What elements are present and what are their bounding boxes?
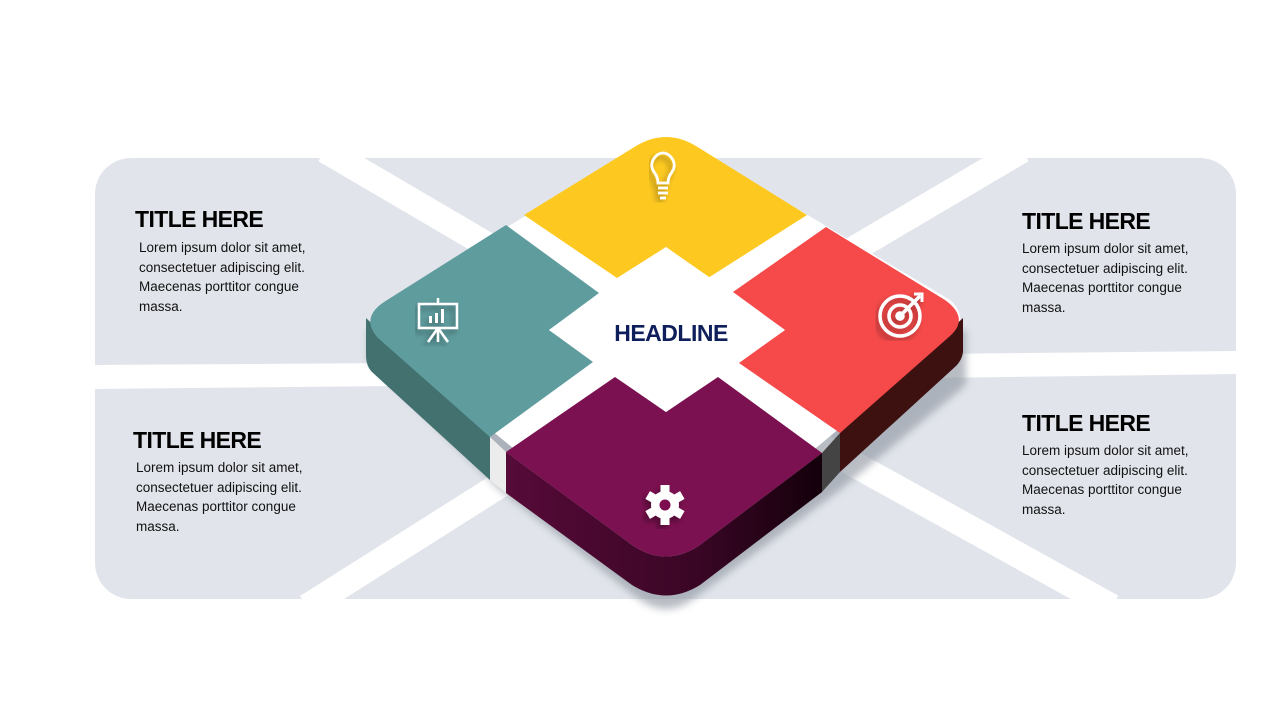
body: top right xyxy=(1022,241,1189,314)
body: top right: massa. xyxy=(1022,300,1066,314)
text block: top left xyxy=(135,206,306,314)
body: top left: consectetuer adipiscing elit. xyxy=(139,260,305,274)
body: top left xyxy=(139,240,306,314)
body: bottom left: Maecenas porttitor congue xyxy=(136,499,296,514)
body: top right: consectetuer adipiscing elit. xyxy=(1022,260,1188,276)
text block: top right xyxy=(1022,208,1189,314)
body: bottom right: consectetuer adipiscing elit. xyxy=(1022,462,1188,478)
body: top right: Maecenas porttitor congue xyxy=(1022,280,1182,295)
body: top left: massa. xyxy=(139,298,183,314)
body: bottom left: Lorem ipsum dolor sit amet, xyxy=(136,460,303,475)
body: bottom left: consectetuer adipiscing elit. xyxy=(136,480,302,494)
icon: target xyxy=(880,294,922,336)
title: top right: TITLE HERE xyxy=(1022,208,1150,234)
icon: light bulb xyxy=(652,153,674,198)
slab: yellow segment xyxy=(524,137,807,278)
slab: red segment xyxy=(733,227,963,472)
slab: purple segment xyxy=(506,377,822,596)
body: bottom left: massa. xyxy=(136,518,180,534)
icon: presentation board xyxy=(419,298,457,342)
diagram background and 3D slab xyxy=(95,137,1236,614)
slab: teal segment xyxy=(366,225,599,480)
body: top left: Lorem ipsum dolor sit amet, xyxy=(139,240,306,255)
body: bottom right xyxy=(1022,443,1189,516)
body: bottom left xyxy=(136,460,303,534)
body: bottom right: massa. xyxy=(1022,502,1066,516)
body: bottom right: Lorem ipsum dolor sit amet, xyxy=(1022,443,1189,458)
slab shadow xyxy=(368,330,966,609)
center headline diamond xyxy=(549,247,785,412)
title: bottom left: TITLE HERE xyxy=(133,427,261,453)
body: top right: Lorem ipsum dolor sit amet, xyxy=(1022,241,1189,256)
icon: gear xyxy=(645,485,685,525)
text block: bottom left xyxy=(133,427,303,534)
text block: bottom right xyxy=(1022,410,1189,516)
body: bottom right: Maecenas porttitor congue xyxy=(1022,482,1182,497)
slab white top base xyxy=(370,139,960,556)
center headline diamond: HEADLINE xyxy=(614,320,728,346)
background panel with white cross bands xyxy=(95,150,1236,607)
gap side between teal and purple xyxy=(490,437,506,493)
title: top left: TITLE HERE xyxy=(135,206,263,232)
gap side between purple and red xyxy=(822,433,840,492)
title: bottom right: TITLE HERE xyxy=(1022,410,1150,436)
body: top left: Maecenas porttitor congue xyxy=(139,279,299,294)
